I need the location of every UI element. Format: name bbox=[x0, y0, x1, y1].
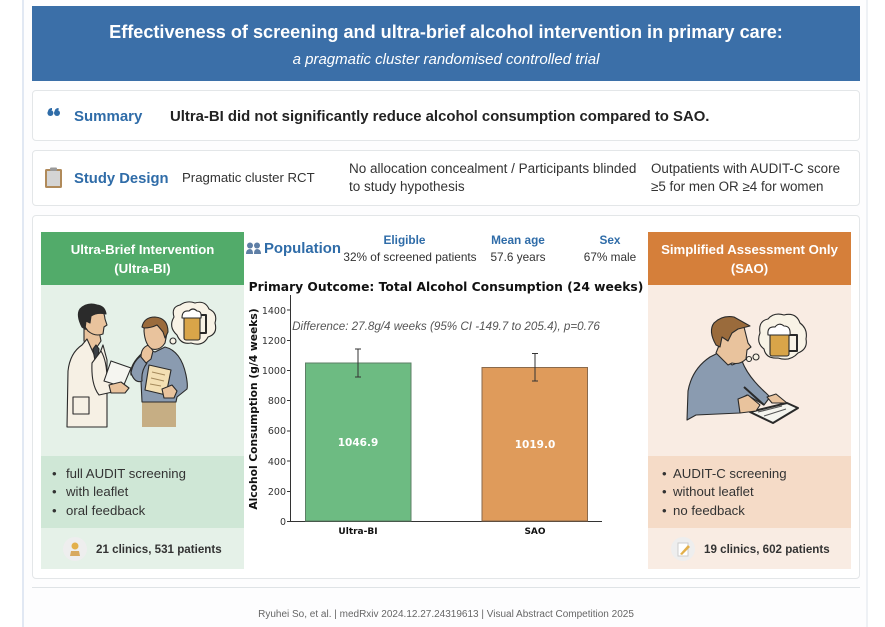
chart title: Primary Outcome: Total Alcohol Consumption (24 weeks) bbox=[249, 280, 643, 294]
Ultra-BI heading: Ultra-Brief Intervention bbox=[71, 242, 214, 257]
trial type: Pragmatic cluster RCT bbox=[182, 170, 315, 185]
SAO heading bbox=[648, 232, 851, 285]
eligible stat: 32% of screened patients bbox=[343, 250, 477, 264]
allocation and blinding: to study hypothesis bbox=[349, 179, 465, 194]
y axis title: Alcohol Consumption (g/4 weeks) bbox=[247, 308, 260, 510]
sex stat bbox=[584, 233, 636, 264]
study design heading: Study Design bbox=[74, 171, 169, 187]
eligible stat bbox=[343, 233, 477, 264]
SAO components: without leaflet bbox=[673, 484, 754, 499]
y axis labels: 0 bbox=[280, 517, 286, 528]
y axis labels: 1200 bbox=[262, 336, 286, 347]
eligibility criteria bbox=[651, 161, 840, 194]
panel: SAO arm bbox=[648, 232, 851, 569]
y axis labels: 800 bbox=[268, 396, 286, 407]
eligible stat: Eligible bbox=[384, 233, 425, 247]
axes bbox=[290, 295, 602, 522]
panel: study design bbox=[32, 150, 860, 206]
mean age stat bbox=[490, 233, 546, 264]
summary text: Ultra-BI did not significantly reduce alcohol consumption compared to SAO. bbox=[170, 108, 709, 124]
y axis labels: 1000 bbox=[262, 366, 286, 377]
panel: summary bbox=[32, 90, 860, 141]
summary heading: Summary bbox=[74, 108, 142, 125]
allocation and blinding: No allocation concealment / Participants blinded bbox=[349, 161, 636, 176]
difference annotation: Difference: 27.8g/4 weeks (95% CI -149.7 to 205.4), p=0.76 bbox=[292, 320, 600, 333]
SAO components: • bbox=[662, 502, 667, 518]
Ultra-BI components: • bbox=[52, 502, 57, 518]
Ultra-BI components: full AUDIT screening bbox=[66, 466, 186, 480]
title banner bbox=[32, 6, 860, 81]
y axis ticks bbox=[287, 310, 290, 522]
population heading: Population bbox=[264, 241, 341, 257]
icon: memo emoji badge bbox=[671, 537, 695, 561]
Ultra-BI components: with leaflet bbox=[66, 484, 128, 499]
bar: SAO: 1019.0 bbox=[515, 439, 555, 451]
SAO components: • bbox=[662, 466, 667, 480]
Ultra-BI components: • bbox=[52, 484, 57, 499]
allocation and blinding bbox=[349, 161, 636, 194]
bar: Ultra-BI: 1046.9 bbox=[338, 437, 378, 449]
y axis labels: 200 bbox=[268, 487, 286, 498]
bar: Ultra-BI bbox=[306, 349, 411, 537]
Ultra-BI components: • bbox=[52, 466, 57, 480]
icon: clipboard bbox=[45, 168, 62, 188]
y axis labels bbox=[262, 306, 286, 528]
bar: SAO: SAO bbox=[524, 527, 546, 537]
bar: Ultra-BI: Ultra-BI bbox=[338, 527, 378, 537]
Ultra-BI components: oral feedback bbox=[66, 502, 145, 518]
sex stat: Sex bbox=[600, 233, 620, 247]
SAO sample size: 19 clinics, 602 patients bbox=[704, 543, 830, 556]
Ultra-BI sample size: 21 clinics, 531 patients bbox=[96, 543, 222, 556]
SAO heading: Simplified Assessment Only bbox=[661, 242, 838, 257]
illustration: doctor and patient thinking of beer bbox=[66, 301, 216, 428]
mean age stat: 57.6 years bbox=[490, 250, 546, 264]
icon: doctor emoji badge bbox=[63, 538, 87, 560]
eligibility criteria: ≥5 for men OR ≥4 for women bbox=[651, 179, 823, 194]
SAO components: • bbox=[662, 484, 667, 499]
SAO components: AUDIT-C screening bbox=[673, 466, 787, 480]
footer divider bbox=[32, 587, 860, 588]
Ultra-BI components bbox=[41, 456, 244, 528]
bar chart: primary outcome bbox=[247, 280, 643, 537]
eligibility criteria: Outpatients with AUDIT-C score bbox=[651, 161, 840, 176]
population block bbox=[246, 233, 636, 264]
y axis labels: 600 bbox=[268, 426, 286, 437]
y axis labels: 1400 bbox=[262, 306, 286, 317]
footer citation: Ryuhei So, et al. | medRxiv 2024.12.27.24319613 | Visual Abstract Competition 2025 bbox=[258, 609, 634, 620]
Ultra-BI heading bbox=[41, 232, 244, 285]
bar: SAO bbox=[482, 354, 588, 537]
Ultra-BI heading: (Ultra-BI) bbox=[114, 260, 171, 276]
mean age stat: Mean age bbox=[491, 233, 545, 247]
subtitle: a pragmatic cluster randomised controlled trial bbox=[293, 51, 599, 68]
icon: quotation mark bbox=[47, 108, 60, 116]
panel: main results bbox=[32, 215, 860, 579]
title: Effectiveness of screening and ultra-brief alcohol intervention in primary care: bbox=[109, 22, 783, 42]
SAO heading: (SAO) bbox=[731, 260, 768, 276]
sex stat: 67% male bbox=[584, 250, 636, 264]
SAO components bbox=[648, 456, 851, 528]
y axis labels: 400 bbox=[268, 457, 286, 468]
panel: Ultra-BI arm bbox=[41, 232, 244, 569]
illustration: man filling in form thinking of beer bbox=[686, 314, 807, 424]
SAO components: no feedback bbox=[673, 502, 745, 518]
icon: people bbox=[246, 242, 261, 254]
